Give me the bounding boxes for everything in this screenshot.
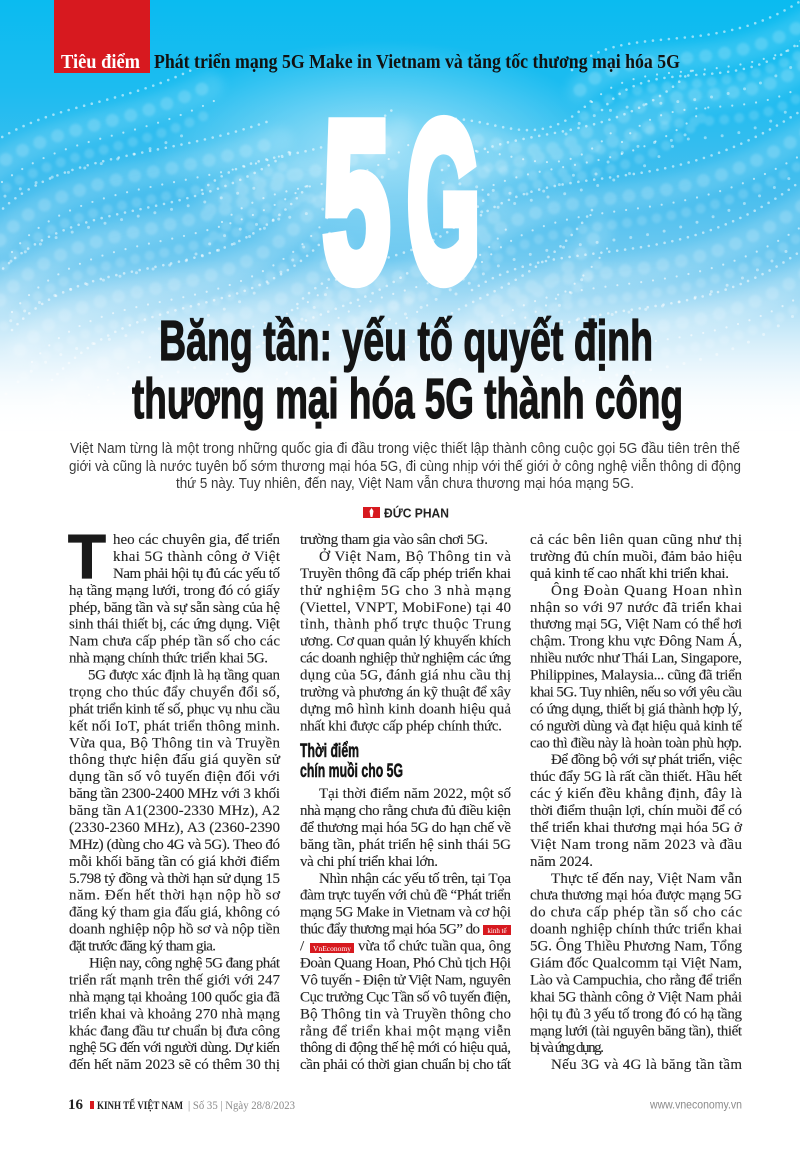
column 2 text: dụng của 5G, đánh giá nhu cầu thị [300,668,511,684]
column 2 text: nhất khi được cấp phép chính thức. [300,718,502,734]
column 1 text: 5G được xác định là hạ tầng quan [88,668,280,684]
column 1 text: băng tần 2300-2400 MHz với 3 khối [69,786,280,802]
column 1 text: phát triển kinh tế số, phục vụ nhu cầu [69,701,280,717]
column 2 text: đàm trực tuyến với chủ đề “Phát triển [300,888,512,904]
column 3 text: Giám đốc Qualcomm tại Việt Nam, [530,956,742,972]
column 1 text: sinh thái thiết bị, các ứng dụng. Việt [69,617,281,633]
column 2 text [300,532,512,1073]
footer: 16 [68,1097,84,1113]
column 1 text: khai 5G thành công ở Việt [113,549,281,565]
magazine page: G [407,75,480,327]
intro paragraph: thứ 5 này. Tuy nhiên, đến nay, Việt Nam vẫn chưa thương mại hóa mạng 5G. [176,475,634,492]
column 2 text: Bộ Thông tin và Truyền thông cho [300,1006,511,1022]
column 1 text: (2330-2360 MHz), A3 (2360-2390 [69,820,280,836]
column 3 text: chưa thương mại hóa được mạng 5G [530,888,742,904]
column 3 text: hội tụ đủ 3 yếu tố trong đó có hạ tầng [530,1006,742,1022]
footer: www.vneconomy.vn [649,1100,742,1112]
column 1 text: nhà mạng chính thức triển khai 5G. [69,651,268,667]
column 2 text: cần phải có thời gian chuẩn bị cho tất [300,1057,512,1073]
column 3 text: cao thì điều này là hoàn toàn phù hợp. [530,735,742,751]
footer: | Số 35 | Ngày 28/8/2023 [188,1099,295,1112]
column 3 text: thương mại 5G, Việt Nam có thể hơi [530,617,742,633]
column 2 text: Nhìn nhận các yếu tố trên, tại Tọa [319,871,511,887]
intro paragraph: giới và cũng là nước tuyên bố sớm thương mại hóa 5G, đi cùng nhịp với thế giới ở công nghệ viễn thông di động [69,458,741,475]
column 2 text: Tại thời điểm năm 2022, một số [319,786,512,802]
column 3 text: khai 5G. Tuy nhiên, nếu so với yêu cầu [530,684,742,700]
column 3 text: có người dùng và đạt hiệu quả kinh tế [530,718,742,734]
column 2 text: thúc đẩy thương mại hóa 5G” do [300,922,480,938]
column 2 text: tỉnh, thành phố trực thuộc Trung [300,617,512,633]
logo badge: Kinh tế [483,925,511,935]
column 1 text: trọng cho thúc đẩy chuyển đổi số, [69,684,280,700]
column 2 text: trường tham gia vào sân chơi 5G. [300,532,488,548]
column 3 text: mạng lưới (tài nguyên băng tần), thiết [530,1023,743,1039]
intro paragraph: Việt Nam từng là một trong những quốc gia đi đầu trong việc thiết lập thành công cuộc gọi 5G đầu tiên trên thế [70,440,741,457]
column 1 text: phép, băng tần và sự sẵn sàng của hệ [69,600,280,616]
column 1 text [68,523,281,1073]
column 2 text: nhà mạng cho rằng chưa đủ điều kiện [300,803,512,819]
section heading: Thời điểm chín muồi cho 5G: chín muồi cho 5G [300,761,403,782]
column 1 text: khác đang đầu tư chuẩn bị đưa công [69,1023,280,1039]
column 3 text: khai 5G thành công ở Việt Nam phải [530,989,742,1005]
byline with author icon: ĐỨC PHAN [384,506,449,520]
column 2 text: mạng 5G Make in Vietnam và cơ hội [300,905,511,921]
column 2 text: để thương mại hóa 5G do hạn chế về [300,820,511,836]
column 2 text: thử nghiệm 5G cho 3 nhà mạng [300,583,512,599]
column 3 text: nhận so với 97 nước đã triển khai [530,600,742,616]
column 1 text: kết nối IoT, phát triển thông minh. [69,718,280,734]
column 1 text: MHz) (dùng cho 4G và 5G). Theo đó [69,837,280,853]
main title [132,309,683,431]
column 2 text: Ở Việt Nam, Bộ Thông tin và [319,548,511,565]
column 1 text: 5.798 tỷ đồng và thời hạn sử dụng 15 [69,871,280,887]
column 3 text: doanh nghiệp chính thức triển khai [530,922,742,938]
column 2 text: / [300,939,305,955]
column 1 text: doanh nghiệp nộp hồ sơ và nộp tiền [69,922,280,938]
column 3 text: Để đồng bộ với sự phát triển, việc [551,752,742,768]
column 2 text: vừa tổ chức tuần qua, ông [358,939,512,955]
section heading: Thời điểm chín muồi cho 5G [300,741,403,782]
column 3 text: trường đủ chín muồi, đảm bảo hiệu [530,549,742,565]
intro paragraph [69,440,741,492]
column 2 text: Vô tuyến - Điện tử Việt Nam, nguyên [300,972,512,988]
column 2 text: băng tần, phát triển hệ sinh thái 5G [300,837,511,853]
column 3 text: thể triển khai thương mại hóa 5G ở [530,820,743,836]
column 3 text: Ông Đoàn Quang Hoan nhìn [551,582,742,599]
column 3 text: nhiều nước như Thái Lan, Singapore, [530,651,742,667]
column 2 text: trường và phương án kỹ thuật để xây [300,684,512,700]
column 1 text: đến hết năm 2023 sẽ có thêm 30 thị [69,1057,280,1073]
column 2 text: rằng để triển khai một mạng viễn [300,1023,512,1039]
column 2 text: ương. Cơ quan quản lý khuyến khích [300,634,512,650]
column 1 text: Nam phải hội tụ đủ các yếu tố [113,566,280,582]
column 3 text: Nếu 3G và 4G là băng tần tầm [551,1057,742,1073]
column 2 text: các doanh nghiệp thử nghiệm các ứng [300,651,512,667]
footer [68,1097,742,1113]
drop cap T: T [68,523,106,592]
column 1 text: thông thực hiện đấu giá quyền sử [69,752,281,768]
column 3 text: năm 2024. [530,854,593,870]
column 2 text: và chi phí triển khai lớn. [300,854,438,870]
column 2 text: Cục trưởng Cục Tần số vô tuyến điện, [300,989,511,1005]
column 1 text: triển rất mạnh trên thế giới với 247 [69,972,280,988]
large 5G graphic: 5 [323,75,390,327]
column 3 text: thúc đẩy 5G là rất cần thiết. Hầu hết [530,769,743,785]
column 3 text: quả kinh tế cao nhất khi triển khai. [530,566,729,582]
section tag: Tiêu điểm [54,0,150,73]
column 3 text: Thực tế đến nay, Việt Nam vẫn [551,871,742,887]
column 1 text: năm. Đến hết thời hạn nộp hồ sơ [69,888,281,904]
column 1 text: băng tần A1(2300-2330 MHz), A2 [69,803,280,819]
column 1 text: đặt trước đăng ký tham gia. [69,939,216,955]
column 1 text: đăng ký tham gia đấu giá, không có [69,905,280,921]
column 1 text: dụng tần số vô tuyến điện đối với [69,769,280,785]
section heading: Thời điểm chín muồi cho 5G: Thời điểm [300,741,359,762]
column 1 text: triển khai và khoảng 270 nhà mạng [69,1006,280,1022]
column 2 text: (Viettel, VNPT, MobiFone) tại 40 [300,600,511,616]
column 3 text: các ý kiến đều khẳng định, đây là [530,786,742,802]
column 3 text: chậm. Trong khu vực Đông Nam Á, [530,633,742,650]
column 1 text: nghệ 5G đến với người dùng. Dự kiến [69,1040,280,1056]
logo badge: VnEconomy: VnEconomy [313,944,351,953]
column 3 text: Philippines, Malaysia... cũng đã triển [530,668,742,684]
column 2 text: dựng mô hình kinh doanh hiệu quả [300,701,511,717]
column 1 text: Nam chưa cấp phép tần số cho các [69,634,280,650]
column 1 text: mỗi khối băng tần có giá khởi điểm [69,854,280,870]
column 3 text: có ứng dụng, thiết bị giá thành hợp lý, [530,701,742,717]
column 1 text: Vừa qua, Bộ Thông tin và Truyền [69,735,280,751]
background: blue 5G particle waves [0,0,800,464]
kicker heading: Phát triển mạng 5G Make in Vietnam và tăng tốc thương mại hóa 5G [154,51,680,73]
column 2 text: Truyền thông đã cấp phép triển khai [300,566,511,582]
column 2 text: thông di động thế hệ mới có hiệu quả, [300,1040,511,1056]
column 1 text: hạ tầng mạng lưới, trong đó có giấy [69,583,280,599]
column 2 text: Đoàn Quang Hoan, Phó Chủ tịch Hội [300,956,511,972]
column 1 text: heo các chuyên gia, để triển [113,532,280,548]
column 3 text: thời điểm thuận lợi, chín muồi để có [530,803,742,819]
column 3 text: cả các bên liên quan cũng như thị [530,532,742,548]
section tag: Tiêu điểm: Tiêu điểm [61,51,140,73]
logo badge: Kinh tế: kinh tế [487,927,508,935]
column 3 text [530,532,743,1073]
column 3 text: do chưa cấp phép tần số cho các [530,905,742,921]
column 3 text: bị và ứng dụng. [530,1040,604,1056]
column 1 text: Hiện nay, công nghệ 5G đang phát [89,956,281,972]
column 3 text: 5G. Ông Thiều Phương Nam, Tổng [530,938,742,955]
column 3 text: Việt Nam trong năm 2023 và đầu [530,837,742,853]
column 1 text: nhà mạng tại khoảng 100 quốc gia đã [69,989,280,1005]
footer: KINH TẾ VIỆT NAM [97,1097,183,1112]
column 3 text: Lào và Campuchia, cho rằng để triển [530,972,742,988]
